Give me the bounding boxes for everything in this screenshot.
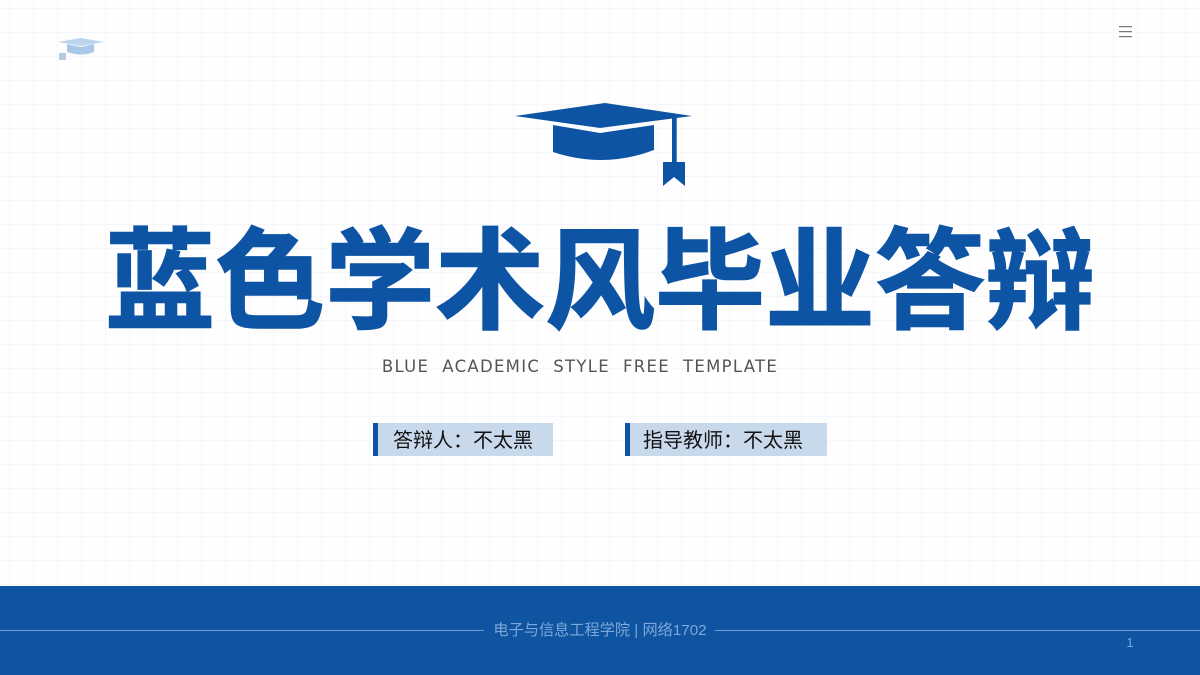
tag: advisor: 指导教师：不太黑 <box>643 424 803 453</box>
icon: graduation cap <box>515 103 692 186</box>
tag: presenter: 答辩人：不太黑 <box>393 424 533 453</box>
footer line left <box>0 630 484 631</box>
subtitle: BLUE ACADEMIC STYLE FREE TEMPLATE <box>382 357 778 376</box>
tag: advisor <box>625 423 827 456</box>
tag: presenter <box>373 423 553 456</box>
title: 蓝色学术风毕业答辩 <box>105 192 1095 352</box>
icon: menu glyph <box>1119 26 1132 38</box>
icon: small faded graduation cap logo <box>58 38 104 60</box>
footer line right <box>715 630 1200 631</box>
footer text: 电子与信息工程学院 | 网络1702 <box>493 622 707 639</box>
page number: 1 <box>1126 635 1134 650</box>
panel: footer band <box>0 586 1200 675</box>
